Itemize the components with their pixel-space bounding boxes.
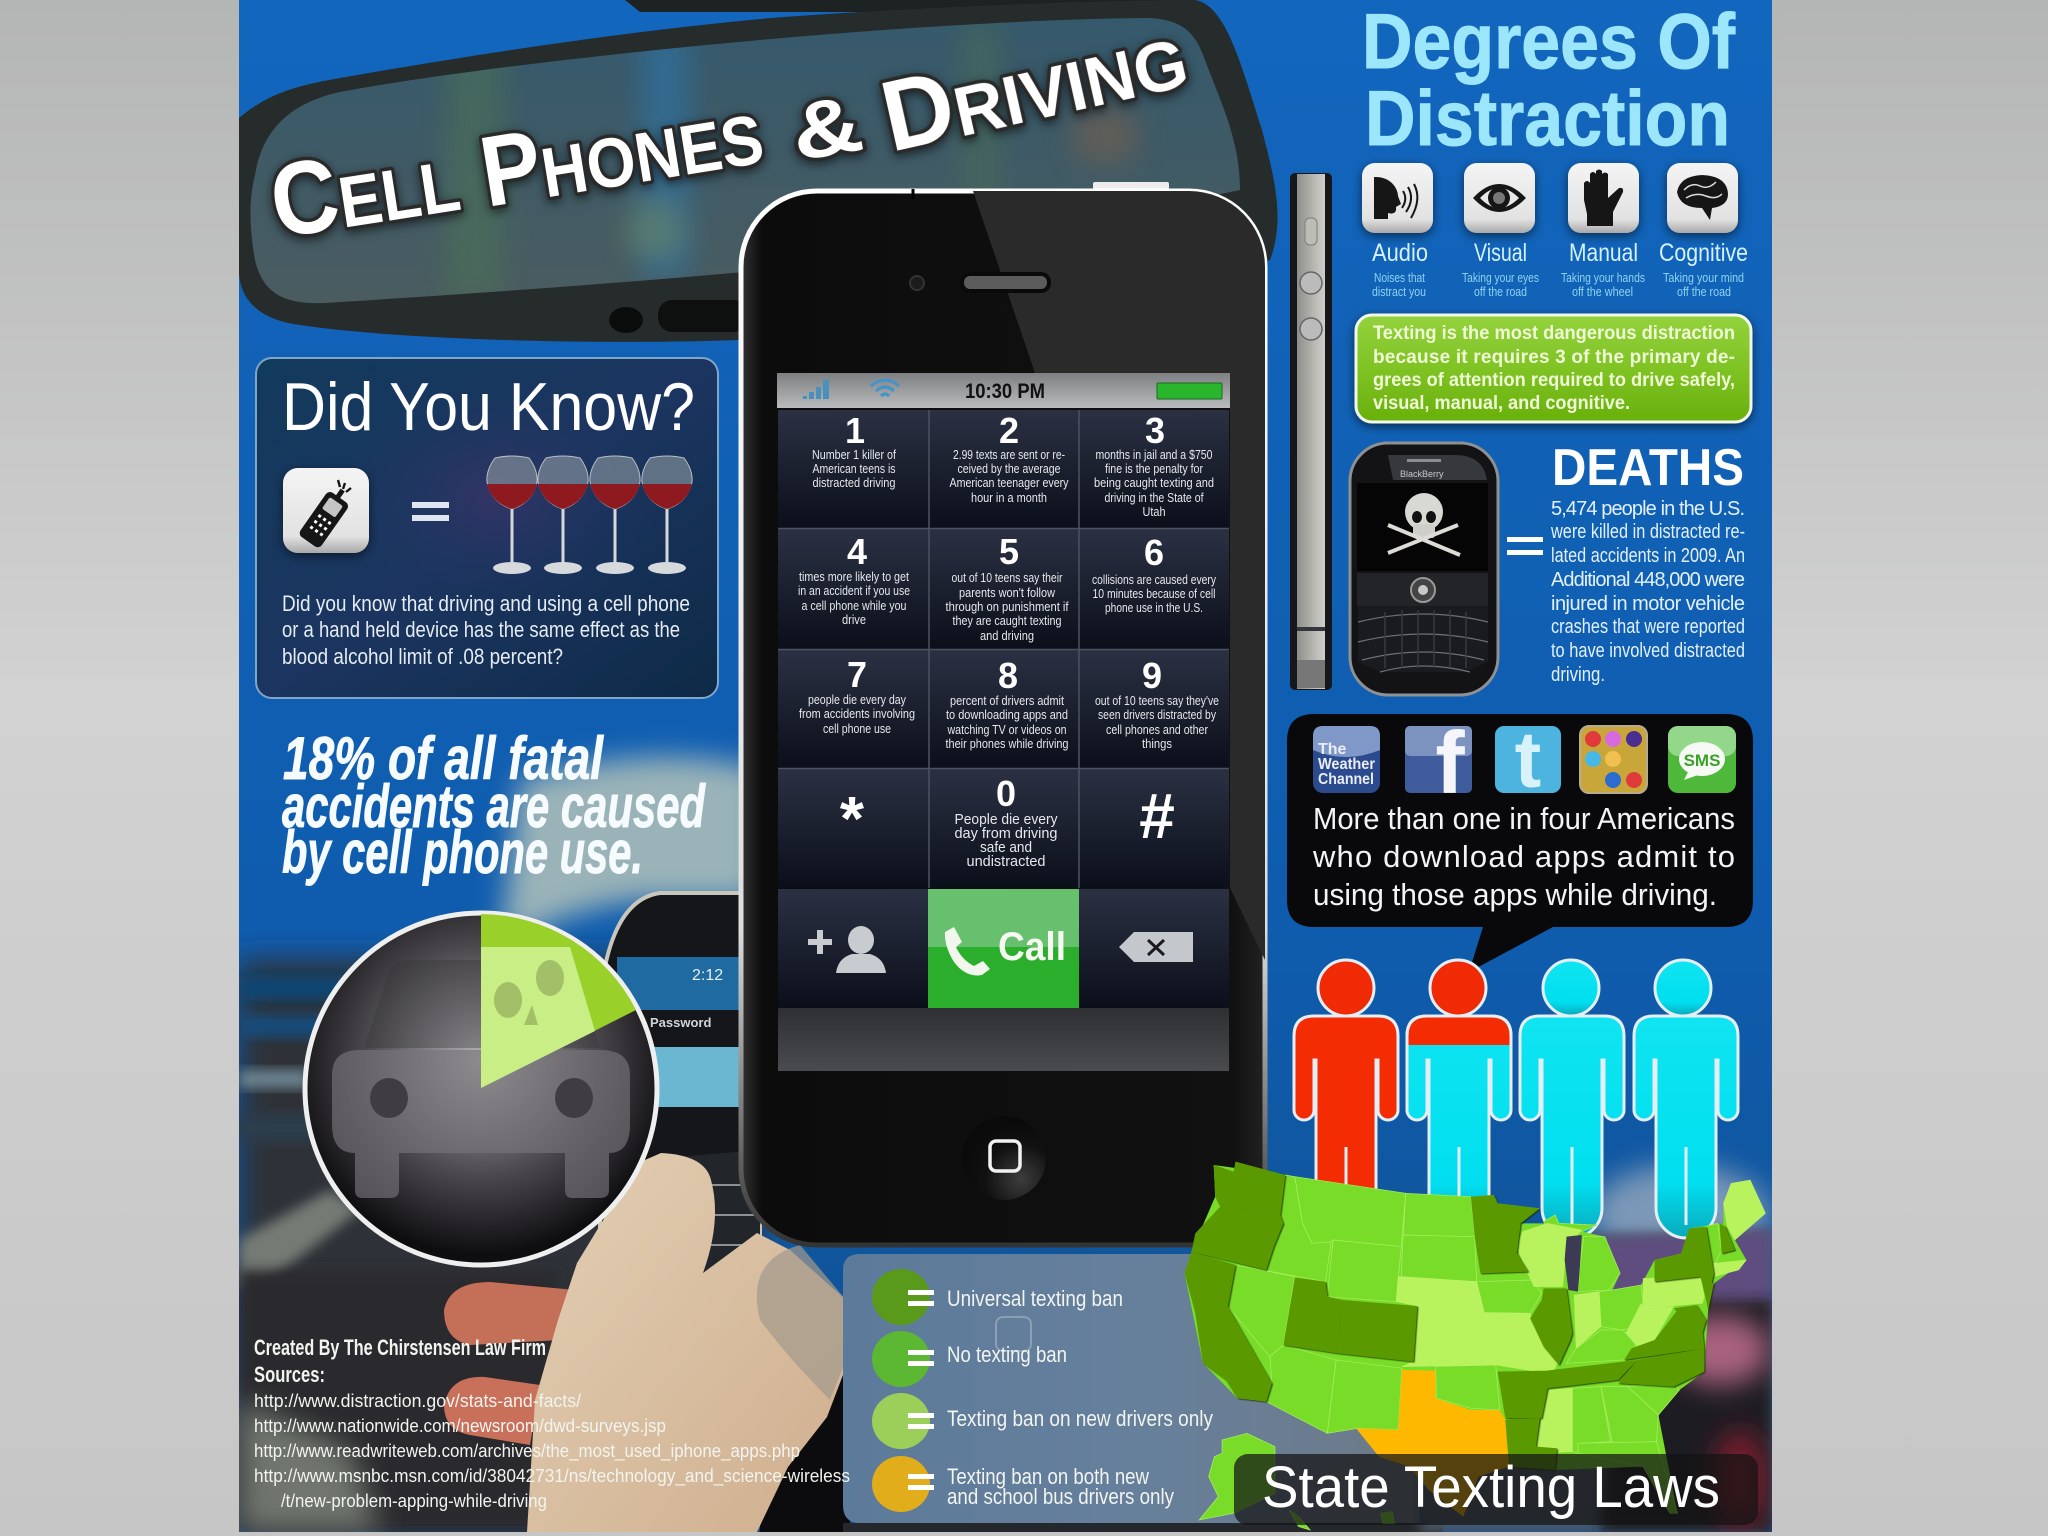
text: credits and sources: Sources: bbox=[254, 1362, 325, 1387]
key 5 bbox=[946, 531, 1069, 643]
degree labels: off the road bbox=[1677, 284, 1731, 299]
key 8: 8 bbox=[998, 655, 1018, 696]
phone screen status bar bbox=[777, 373, 1230, 408]
left photo: dashboard with phone: 2:12 bbox=[692, 967, 723, 984]
text: credits and sources: http://www.distraction.gov/stats-and-facts/ bbox=[254, 1391, 581, 1411]
degree labels: Noises that bbox=[1374, 270, 1425, 285]
icon: weather channel bbox=[1313, 726, 1380, 793]
icon: audio bbox=[1362, 163, 1433, 233]
icon: facebook bbox=[1405, 713, 1472, 812]
icon: game bbox=[1580, 726, 1647, 793]
key 8: watching TV or videos on bbox=[947, 722, 1066, 737]
key 9: out of 10 teens say they've bbox=[1095, 693, 1219, 708]
key 5: they are caught texting bbox=[952, 613, 1062, 628]
key 9: 9 bbox=[1142, 655, 1162, 696]
callout: texting most dangerous: grees of attention required to drive safely, bbox=[1373, 370, 1735, 391]
degree labels: Taking your eyes bbox=[1462, 270, 1539, 285]
callout: 18 percent bbox=[282, 725, 706, 886]
key 3: Utah bbox=[1142, 504, 1166, 519]
text: did you know body: Did you know that driving and using a cell phone bbox=[282, 591, 690, 616]
key 6: phone use in the U.S. bbox=[1105, 600, 1203, 615]
key 0: safe and bbox=[980, 839, 1032, 856]
key 4: 4 bbox=[847, 531, 867, 572]
callout: 18 percent: by cell phone use. bbox=[282, 819, 643, 886]
icon: blackberry with skull bbox=[1350, 443, 1498, 695]
icon: four wine glasses bbox=[487, 456, 692, 574]
rear-view mirror with title bbox=[239, 0, 1278, 345]
degree labels: Manual bbox=[1569, 239, 1638, 267]
key 1 bbox=[812, 410, 896, 490]
map: state texting laws bbox=[1185, 1162, 1766, 1530]
legend: universal texting ban: Universal texting ban bbox=[947, 1286, 1123, 1311]
icon: wifi bbox=[871, 380, 899, 396]
callout: texting most dangerous: because it requires 3 of the primary de- bbox=[1373, 347, 1735, 368]
key 3: 3 bbox=[1145, 410, 1165, 451]
icon: visual bbox=[1464, 163, 1535, 233]
key 8: percent of drivers admit bbox=[950, 693, 1064, 708]
key 2: American teenager every bbox=[950, 475, 1069, 490]
key 2 bbox=[950, 410, 1069, 505]
text: did you know body: blood alcohol limit of .08 percent? bbox=[282, 644, 563, 669]
degree labels: Taking your hands bbox=[1561, 270, 1645, 285]
panel: deaths text: DEATHS bbox=[1552, 439, 1744, 497]
key 2: 2.99 texts are sent or re- bbox=[953, 447, 1065, 462]
key 7: cell phone use bbox=[823, 721, 891, 736]
person 1 red bbox=[1294, 960, 1398, 1238]
title: cell phones and driving: CELL bbox=[263, 117, 466, 261]
heading: degrees of distraction bbox=[1362, 0, 1736, 162]
key 6 bbox=[1092, 532, 1216, 615]
blue poster background bbox=[239, 0, 1772, 1532]
legend: universal texting ban bbox=[872, 1269, 1123, 1325]
text: credits and sources: http://www.readwriteweb.com/archives/the_most_used_iphone_apps.php bbox=[254, 1441, 800, 1462]
key 3: being caught texting and bbox=[1094, 475, 1214, 490]
key 2: 2 bbox=[999, 410, 1019, 451]
text: bubble copy: using those apps while driving. bbox=[1313, 877, 1717, 912]
icon: sms: SMS bbox=[1684, 751, 1720, 770]
icon: facebook: f bbox=[1435, 713, 1465, 812]
panel: deaths text: lated accidents in 2009. An bbox=[1551, 545, 1745, 567]
icon: signal bars bbox=[803, 380, 829, 399]
key 2: hour in a month bbox=[971, 490, 1047, 505]
person 4 cyan bbox=[1634, 960, 1738, 1238]
key 9: seen drivers distracted by bbox=[1098, 707, 1216, 722]
keypad grid bbox=[778, 410, 1229, 1071]
add contact button bbox=[808, 926, 886, 973]
speech bubble: app usage bbox=[1287, 713, 1753, 972]
key 9: things bbox=[1142, 736, 1172, 751]
degree labels: off the road bbox=[1474, 284, 1527, 299]
key star: * bbox=[840, 785, 865, 854]
degree labels: Taking your mind bbox=[1663, 270, 1744, 285]
icon: twitter: t bbox=[1515, 715, 1541, 804]
key 3: driving in the State of bbox=[1104, 490, 1204, 505]
key 9: cell phones and other bbox=[1106, 722, 1209, 737]
callout: texting most dangerous bbox=[1356, 315, 1751, 422]
icon: car radar circle with skull sector bbox=[305, 913, 657, 1265]
key 5: and driving bbox=[980, 628, 1034, 643]
icon: twitter bbox=[1495, 715, 1561, 804]
degree labels: Cognitive bbox=[1659, 239, 1748, 267]
legend: no texting ban bbox=[872, 1331, 1067, 1387]
call button bbox=[928, 889, 1079, 1008]
panel: deaths text: Additional 448,000 were bbox=[1551, 569, 1745, 591]
text: bubble copy: More than one in four Americans bbox=[1313, 801, 1735, 836]
key 8 bbox=[946, 655, 1068, 751]
icon: battery bbox=[1157, 383, 1222, 399]
key 8: to downloading apps and bbox=[946, 707, 1068, 722]
key 4: a cell phone while you bbox=[802, 598, 906, 613]
panel: deaths text: to have involved distracted bbox=[1551, 640, 1745, 662]
map title bar: state texting laws: State Texting Laws bbox=[1262, 1455, 1720, 1520]
key 0 bbox=[954, 773, 1058, 870]
icon: weather channel: The bbox=[1318, 741, 1347, 758]
key 3: months in jail and a $750 bbox=[1096, 447, 1212, 462]
key 7 bbox=[799, 654, 915, 736]
left photo: dashboard with phone bbox=[239, 757, 850, 1532]
text: credits and sources: http://www.nationwide.com/newsroom/dwd-surveys.jsp bbox=[254, 1416, 666, 1436]
key 0: People die every bbox=[954, 811, 1058, 828]
equals sign: deaths bbox=[1507, 537, 1543, 555]
person 2 part red bbox=[1407, 960, 1511, 1238]
callout: texting most dangerous: visual, manual, and cognitive. bbox=[1373, 393, 1630, 414]
key 1: Number 1 killer of bbox=[812, 447, 896, 462]
key 2: ceived by the average bbox=[958, 461, 1060, 476]
callout: 18 percent: accidents are caused bbox=[282, 773, 706, 840]
backspace button bbox=[1119, 932, 1193, 962]
people: one in four chart bbox=[1294, 960, 1738, 1238]
text: did you know body: or a hand held device has the same effect as the bbox=[282, 617, 680, 642]
key 4: drive bbox=[842, 612, 866, 627]
panel: did you know bbox=[256, 358, 718, 698]
key 6: 6 bbox=[1144, 532, 1164, 573]
key 4: in an accident if you use bbox=[798, 583, 910, 598]
key 4 bbox=[798, 531, 910, 627]
key hash: # bbox=[1139, 780, 1175, 852]
text: bubble copy bbox=[1312, 801, 1735, 912]
heading: did you know: Did You Know? bbox=[282, 369, 695, 445]
degree labels: Audio bbox=[1372, 239, 1428, 267]
key 0: 0 bbox=[996, 773, 1016, 814]
icon: home button bbox=[962, 1116, 1046, 1200]
key 1: 1 bbox=[845, 410, 865, 451]
panel: deaths text bbox=[1550, 439, 1745, 686]
text: did you know body bbox=[282, 591, 690, 669]
panel: deaths text: driving. bbox=[1551, 664, 1605, 686]
key 6: 10 minutes because of cell bbox=[1092, 586, 1216, 601]
call button: Call bbox=[998, 925, 1066, 969]
key 7: 7 bbox=[847, 654, 867, 695]
key 1: distracted driving bbox=[812, 475, 896, 490]
panel: deaths text: injured in motor vehicle bbox=[1551, 593, 1745, 615]
key 5: out of 10 teens say their bbox=[952, 570, 1063, 585]
key 4: times more likely to get bbox=[799, 569, 909, 584]
panel: deaths text: 5,474 people in the U.S. bbox=[1551, 498, 1745, 520]
degree labels: Visual bbox=[1474, 239, 1527, 267]
key 0: day from driving bbox=[954, 825, 1058, 842]
icon: blackberry with skull: BlackBerry bbox=[1400, 469, 1444, 479]
degree labels bbox=[1372, 239, 1748, 299]
map base silhouette bbox=[1185, 1165, 1766, 1517]
degree labels: distract you bbox=[1372, 284, 1426, 299]
person 3 cyan bbox=[1520, 960, 1624, 1238]
panel: deaths text: crashes that were reported bbox=[1551, 616, 1745, 638]
key 8: their phones while driving bbox=[946, 736, 1068, 751]
key 5: parents won't follow bbox=[959, 585, 1056, 600]
hand holding phone bbox=[444, 1153, 846, 1532]
phone camera and speaker bbox=[910, 272, 1051, 293]
heading: degrees of distraction: Distraction bbox=[1365, 74, 1730, 162]
legend: new drivers only bbox=[872, 1393, 1213, 1449]
text: credits and sources: Created By The Chirstensen Law Firm bbox=[254, 1335, 546, 1360]
main smartphone bbox=[741, 182, 1265, 1245]
icon: cognitive bbox=[1667, 163, 1738, 233]
title: cell phones and driving: PHONES bbox=[473, 73, 770, 229]
key 1: American teens is bbox=[812, 461, 896, 476]
key 3 bbox=[1094, 410, 1214, 519]
side view of phone bbox=[1290, 173, 1332, 690]
legend: no texting ban: No texting ban bbox=[947, 1342, 1067, 1367]
degree labels: off the wheel bbox=[1572, 284, 1633, 299]
key 5: through on punishment if bbox=[946, 599, 1069, 614]
phone screen status bar: 10:30 PM bbox=[965, 380, 1045, 403]
icon: weather channel: Weather bbox=[1318, 756, 1375, 773]
key 6: collisions are caused every bbox=[1092, 572, 1216, 587]
callout: 18 percent: 18% of all fatal bbox=[283, 725, 604, 792]
callout: texting most dangerous: Texting is the most dangerous distraction bbox=[1373, 323, 1735, 344]
legend: new and school bus drivers: Texting ban on both new bbox=[947, 1464, 1149, 1489]
title: cell phones and driving: & bbox=[784, 78, 869, 178]
title: cell phones and driving: DRIVING bbox=[871, 0, 1196, 173]
legend: new and school bus drivers bbox=[872, 1456, 1174, 1512]
left photo: dashboard with phone: Password bbox=[650, 1015, 711, 1030]
icon: manual bbox=[1568, 163, 1639, 233]
key 3: fine is the penalty for bbox=[1105, 461, 1204, 476]
key 7: from accidents involving bbox=[799, 706, 915, 721]
legend: new and school bus drivers: and school bus drivers only bbox=[947, 1484, 1174, 1509]
key 7: people die every day bbox=[808, 692, 906, 707]
panel: map legend bbox=[843, 1254, 1443, 1532]
text: bubble copy: who download apps admit to bbox=[1312, 839, 1735, 874]
key 9 bbox=[1095, 655, 1219, 751]
legend: new drivers only: Texting ban on new drivers only bbox=[947, 1406, 1213, 1431]
key 5: 5 bbox=[999, 531, 1019, 572]
wreck photo background bbox=[1420, 1165, 1772, 1532]
icon: weather channel: Channel bbox=[1318, 771, 1374, 788]
text: credits and sources: http://www.msnbc.msn.com/id/38042731/ns/technology_and_science-wireless bbox=[254, 1466, 850, 1487]
panel: deaths text: were killed in distracted re- bbox=[1550, 521, 1745, 543]
key 0: undistracted bbox=[966, 853, 1046, 870]
text: credits and sources bbox=[254, 1335, 850, 1511]
icon: sms bbox=[1668, 726, 1736, 793]
equals sign bbox=[412, 502, 449, 521]
text: credits and sources: /t/new-problem-apping-while-driving bbox=[281, 1491, 547, 1511]
icon: cell phone tile bbox=[283, 468, 369, 553]
title: cell phones and driving bbox=[266, 36, 1194, 246]
